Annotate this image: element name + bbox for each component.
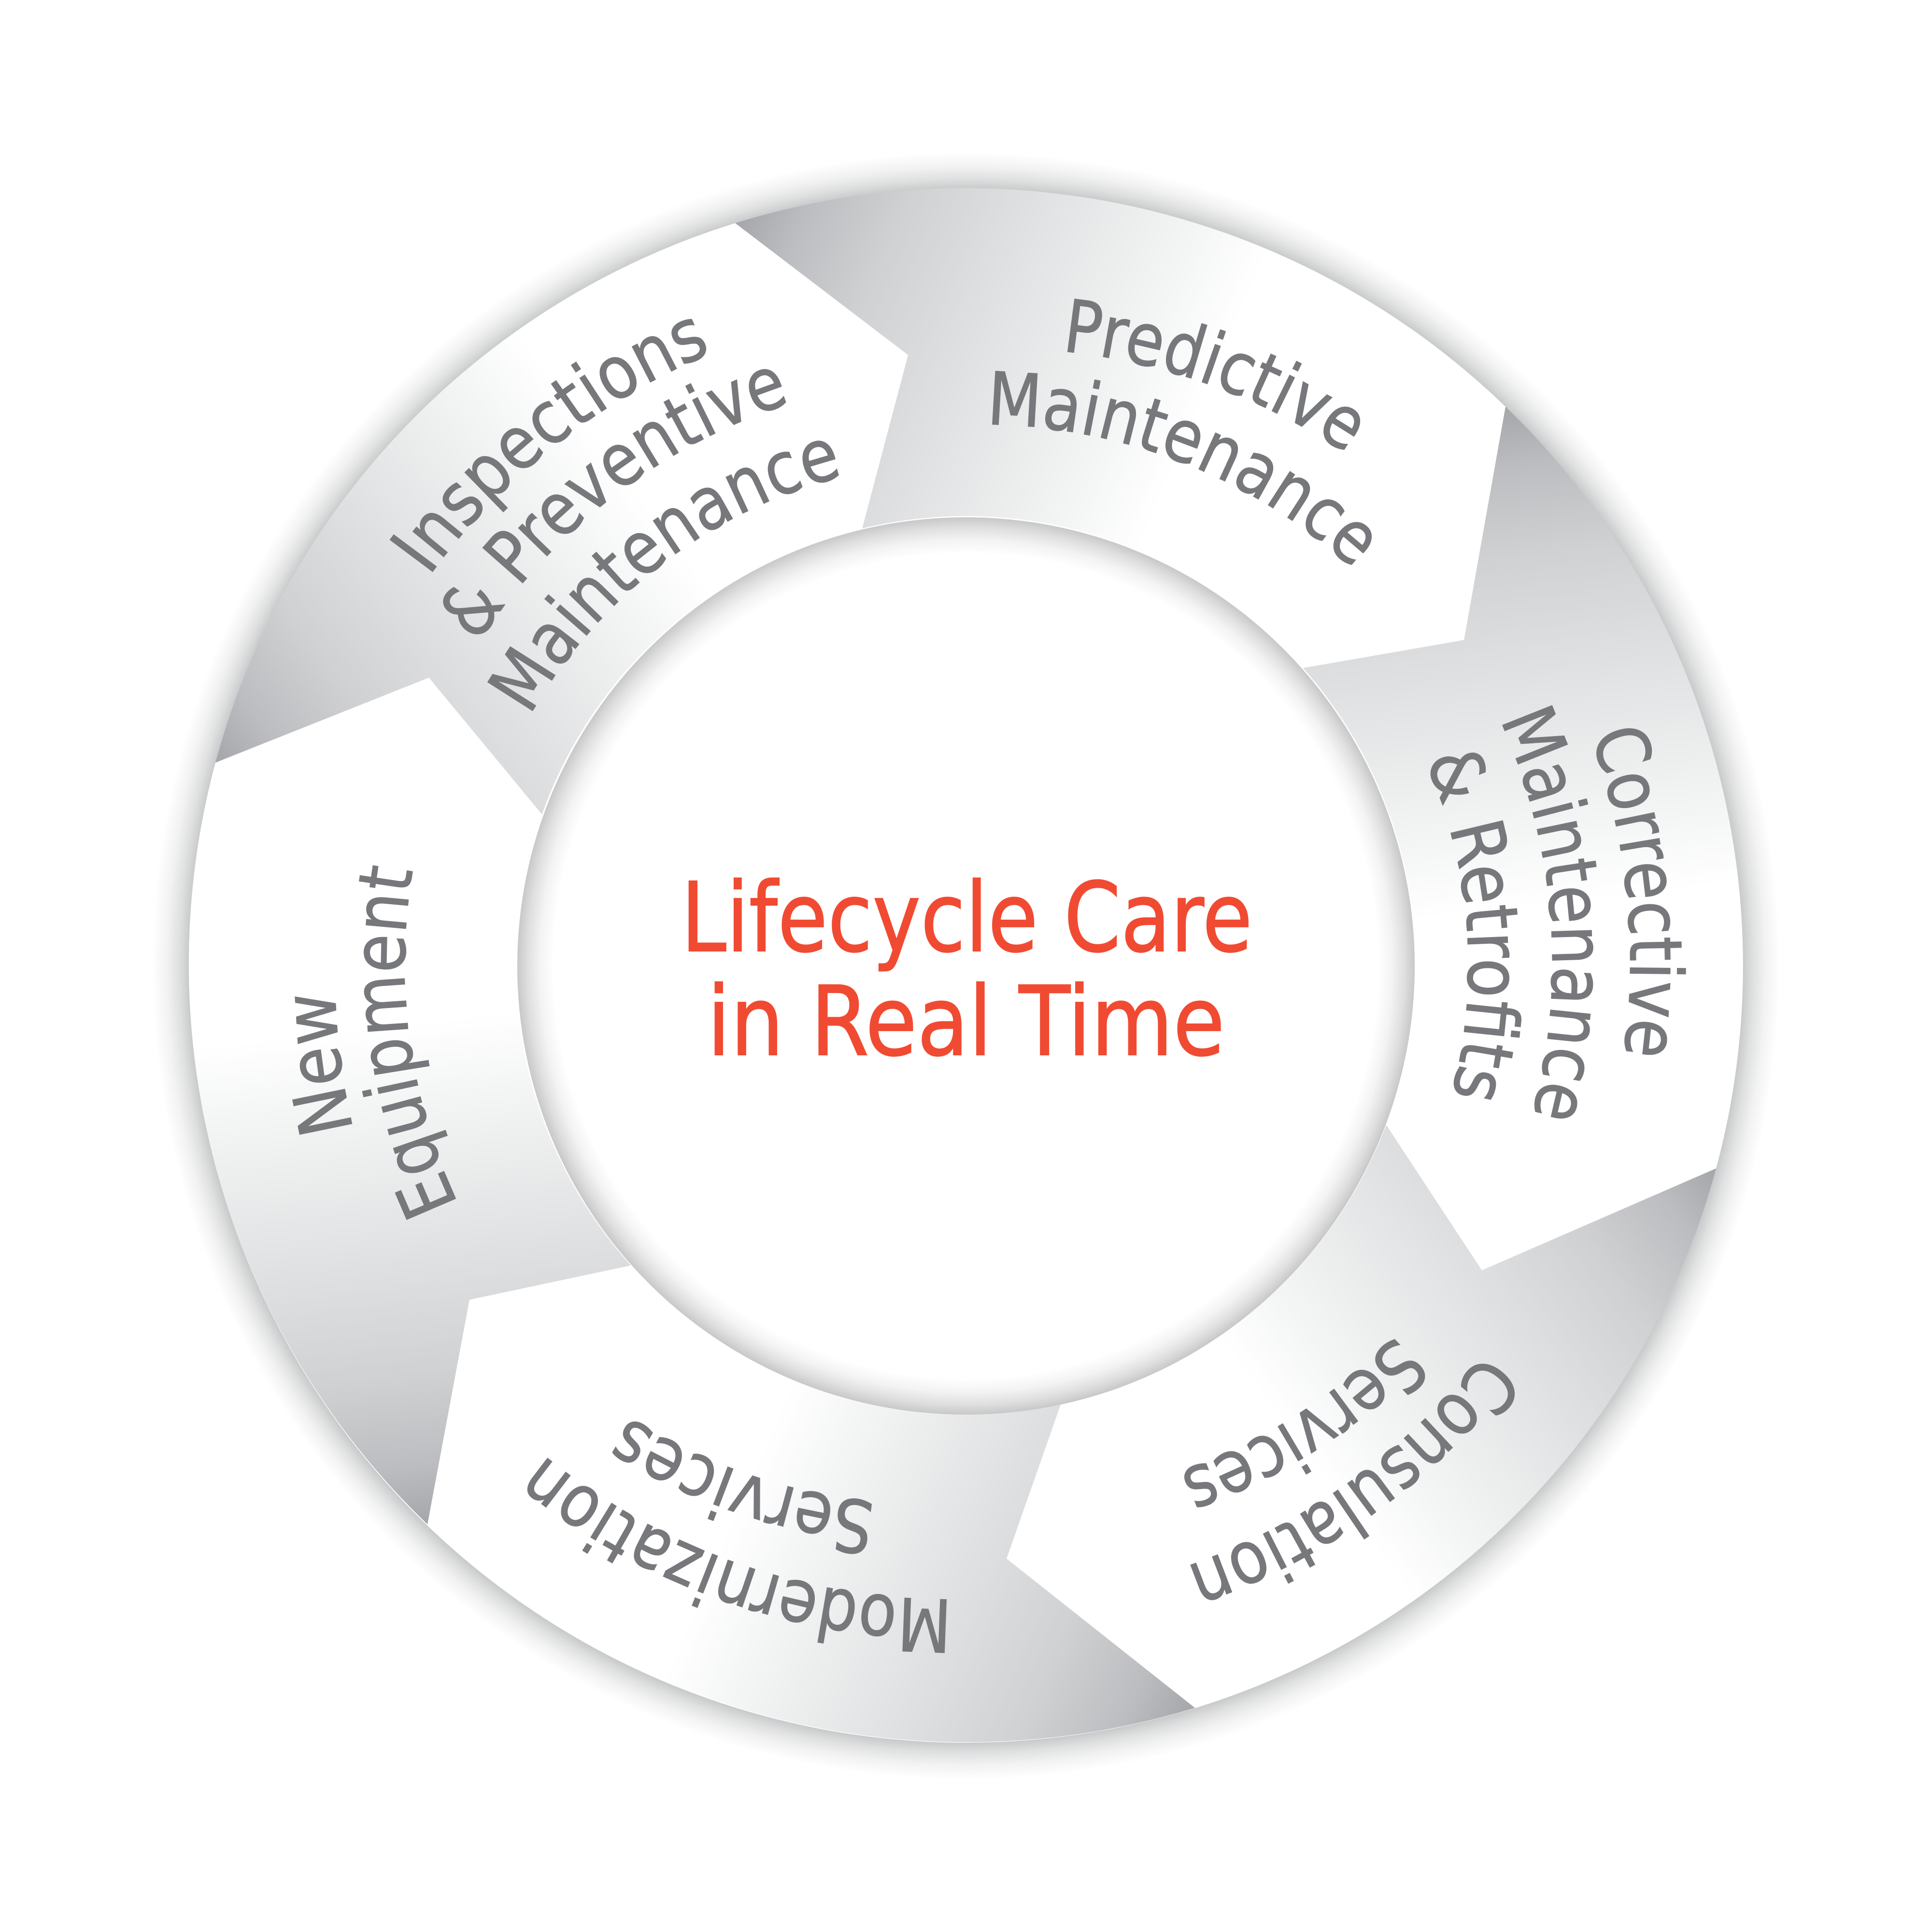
label: consultation services: Consulation Services [1184,1339,1515,1600]
segment shape: new equipment [189,678,631,1524]
panel: modernization services [527,1399,1195,1742]
label: predictive maintenance: PredictiveMaintenance [992,298,1372,565]
segment shape: consultation [1007,1125,1716,1708]
title: in Real Time [707,966,1225,1078]
panel: predictive maintenance [735,188,1506,565]
label: inspections and preventive maintenance: Inspections & Preventive Maintenance [389,319,839,711]
title: Lifecycle Care [681,862,1252,974]
segment shape: corrective [1303,407,1743,1270]
lifecycle ring [188,188,1743,1743]
segment shape: inspections [215,223,908,814]
panel: consultation services [1184,1125,1716,1600]
label: new equipment: New Equipment [292,865,456,1220]
panel: corrective maintenance and retrofits [1303,407,1743,1168]
panel: new equipment [188,762,631,1524]
segment shape: predictive [735,188,1506,668]
panel: inspections and preventive maintenance [215,223,908,814]
center circle [517,517,1415,1415]
ring base [189,189,1743,1743]
label: modernization services: Modernization Services [527,1421,947,1653]
outer ring shadow [150,150,1782,1782]
title [681,862,1252,1078]
segment shape: modernization [427,1265,1195,1742]
label: corrective maintenance and retrofits: CorrectiveMaintenance& Retrofits [1431,705,1686,1119]
